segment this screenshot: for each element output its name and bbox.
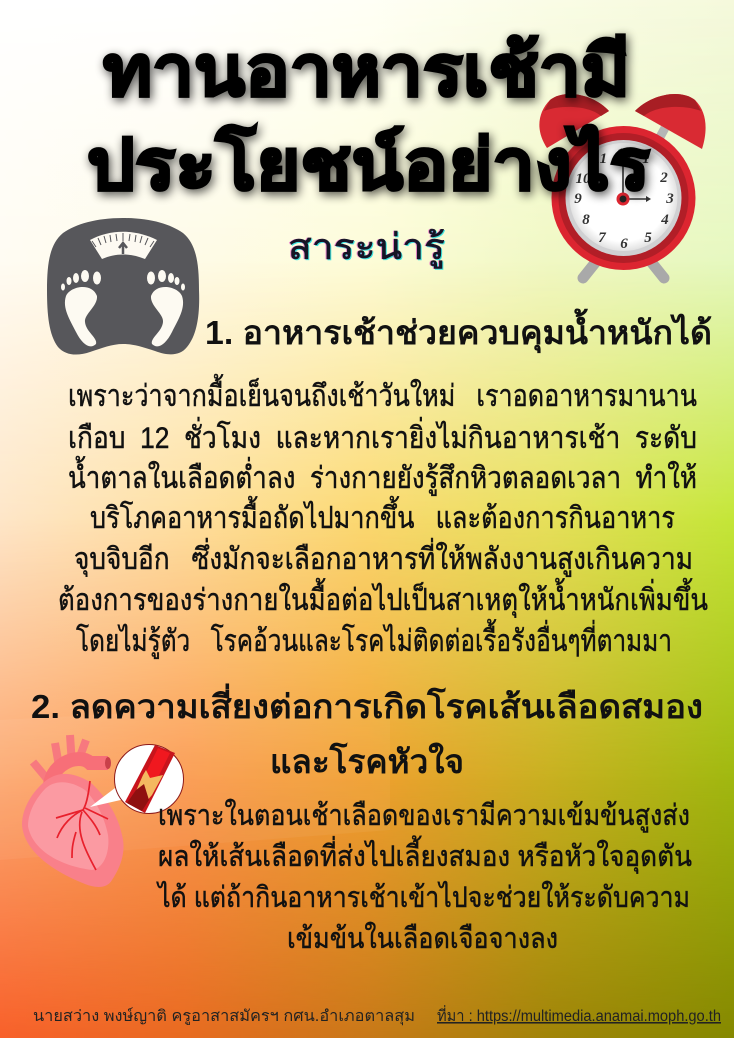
clock numerals: 10 (576, 171, 591, 187)
clock numerals: 5 (644, 230, 652, 246)
footer source: ที่มา : https://multimedia.anamai.moph.go.th (437, 1005, 721, 1025)
subtitle: สาระน่ารู้ (288, 226, 445, 269)
title: ทานอาหารเช้ามี (103, 34, 630, 111)
heart vessels (33, 735, 86, 780)
title: ประโยชน์อย่างไร (87, 124, 650, 205)
clock numerals: 1 (642, 151, 650, 167)
title: ทานอาหารเช้ามี (105, 37, 632, 114)
right footprint (147, 270, 185, 346)
alarm clock (539, 94, 706, 278)
clock numerals: 9 (574, 191, 582, 207)
paragraph 2 (156, 798, 692, 955)
clock body (552, 126, 696, 270)
clock numerals: 8 (582, 212, 590, 228)
title (87, 34, 652, 208)
clock bells (539, 94, 706, 149)
heading 2: และโรคหัวใจ (270, 742, 464, 780)
clock numerals: 11 (593, 151, 607, 167)
clock numerals: 2 (659, 170, 668, 186)
scale dial (90, 232, 157, 259)
heading 1: 1. อาหารเช้าช่วยควบคุมน้ำหนักได้ (205, 308, 712, 354)
clock numerals: 12 (616, 146, 632, 162)
icon: heart (22, 735, 184, 887)
icon: bathroom scale (47, 218, 199, 355)
left footprint (61, 270, 101, 346)
clock hands (616, 155, 651, 206)
paragraph 2: เข้มข้นในเลือดเจือจางลง (287, 921, 558, 955)
title: ประโยชน์อย่างไร (89, 127, 652, 208)
clock numerals: 7 (598, 230, 606, 246)
paragraph 1 (58, 374, 708, 659)
subtitle: สาระน่ารู้ (289, 227, 446, 270)
footer credit: นายสว่าง พงษ์ญาติ ครูอาสาสมัครฯ กศน.อำเภอตาลสุม (33, 1007, 415, 1026)
heading 2: 2. ลดความเสี่ยงต่อการเกิดโรคเส้นเลือดสมอง (31, 683, 703, 725)
heading 2 (31, 683, 703, 780)
clock legs (583, 263, 664, 278)
clock numerals: 6 (620, 236, 628, 252)
artery magnifier callout (90, 744, 184, 814)
subtitle: สาระน่ารู้ (287, 226, 444, 269)
paragraph 2: ผลให้เส้นเลือดที่ส่งไปเลี้ยงสมอง หรือหัวใจอุดตัน (158, 835, 692, 874)
clock numerals (574, 146, 674, 252)
clock numerals: 3 (665, 191, 674, 207)
clock numerals: 4 (660, 212, 669, 228)
